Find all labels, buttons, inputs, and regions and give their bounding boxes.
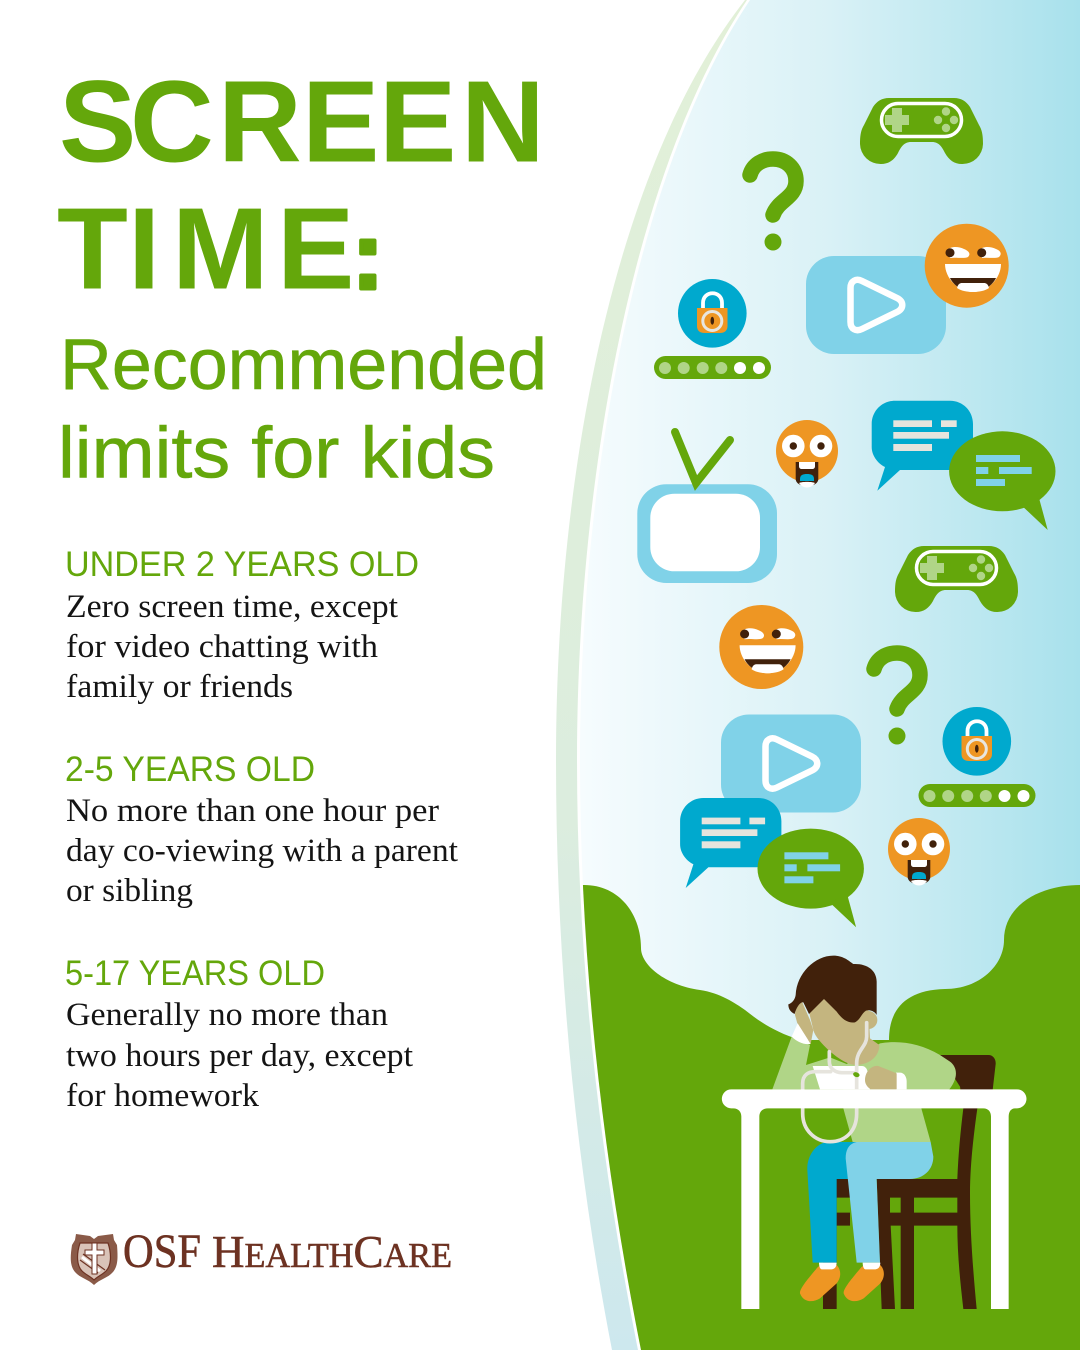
guideline: under 2 years old: for video chatting with bbox=[66, 629, 379, 665]
propping hand bbox=[795, 1002, 813, 1044]
earphone cable bbox=[803, 1023, 867, 1142]
subtitle: Recommended bbox=[60, 325, 547, 405]
subtitle bbox=[58, 325, 547, 494]
logo: OSF HealthCare: HEALTHCARE bbox=[212, 1226, 452, 1277]
icon: laughing emoji 1 bbox=[925, 224, 1009, 308]
guideline: under 2 years old bbox=[65, 545, 419, 705]
icon: shocked emoji 1 bbox=[776, 420, 838, 488]
title: SCREEN bbox=[59, 56, 545, 186]
title: : bbox=[352, 204, 384, 310]
guideline: 2-5 years old: No more than one hour per bbox=[66, 793, 439, 829]
illustration: child at desk with tablet bbox=[722, 956, 1026, 1309]
guideline: 5-17 years old: for homework bbox=[66, 1078, 260, 1114]
background sky panel bbox=[580, 0, 1080, 1350]
icon: padlock and password 2 bbox=[918, 707, 1036, 807]
icon: question mark 1 bbox=[750, 159, 796, 250]
icon: television bbox=[637, 432, 777, 583]
logo wordmark: OSF bbox=[123, 1225, 201, 1278]
chair bbox=[823, 1055, 996, 1309]
guideline: 5-17 years old: Generally no more than bbox=[66, 997, 388, 1033]
guideline: 5-17 years old: two hours per day, except bbox=[66, 1038, 413, 1074]
desk bbox=[722, 1089, 1026, 1309]
tablet bbox=[813, 1066, 870, 1089]
guideline: 2-5 years old bbox=[65, 750, 458, 909]
icon: shocked emoji 2 bbox=[888, 818, 950, 886]
green ground bbox=[570, 885, 1080, 1350]
icon: question mark 2 bbox=[874, 653, 920, 744]
background curved band bbox=[556, 0, 747, 1350]
logo: OSF HealthCare bbox=[71, 1225, 452, 1285]
back shoe bbox=[800, 1263, 840, 1301]
guideline: under 2 years old: UNDER 2 YEARS OLD bbox=[65, 545, 419, 584]
guideline: 5-17 years old: 5-17 YEARS OLD bbox=[65, 954, 325, 993]
sleeve cuff bbox=[896, 1073, 907, 1089]
icon: chat bubbles 1 bbox=[872, 401, 1056, 530]
cable jack bbox=[852, 1071, 860, 1078]
guideline: 5-17 years old bbox=[65, 954, 413, 1114]
icon: padlock and password 1 bbox=[654, 279, 771, 379]
guideline: under 2 years old: family or friends bbox=[66, 669, 293, 705]
front leg jeans bbox=[846, 1142, 933, 1263]
front shoe bbox=[844, 1263, 884, 1301]
icon: laughing emoji 2 bbox=[719, 605, 803, 689]
icon: shield crest bbox=[71, 1234, 118, 1285]
icon: video player 2 bbox=[721, 714, 861, 812]
ear bbox=[859, 1011, 877, 1029]
icon: game controller 1 bbox=[860, 98, 983, 164]
guideline: 2-5 years old: day co-viewing with a parent bbox=[66, 833, 458, 869]
guideline: 2-5 years old: 2-5 YEARS OLD bbox=[65, 750, 315, 789]
icon: game controller 2 bbox=[895, 546, 1018, 612]
guideline: under 2 years old: Zero screen time, except bbox=[66, 589, 398, 625]
hair bbox=[788, 956, 877, 1022]
shirt bbox=[772, 1037, 956, 1142]
icon: chat bubbles 2 bbox=[680, 798, 864, 927]
icon: video player 1 bbox=[806, 256, 946, 354]
resting hand bbox=[865, 1066, 897, 1089]
raised sleeve cuff bbox=[792, 1023, 811, 1044]
subtitle: limits for kids bbox=[58, 414, 495, 494]
neck and face bbox=[809, 997, 879, 1065]
title bbox=[57, 56, 545, 314]
guideline: 2-5 years old: or sibling bbox=[66, 873, 193, 909]
back leg jeans bbox=[807, 1142, 860, 1263]
title: TIME bbox=[57, 184, 354, 314]
